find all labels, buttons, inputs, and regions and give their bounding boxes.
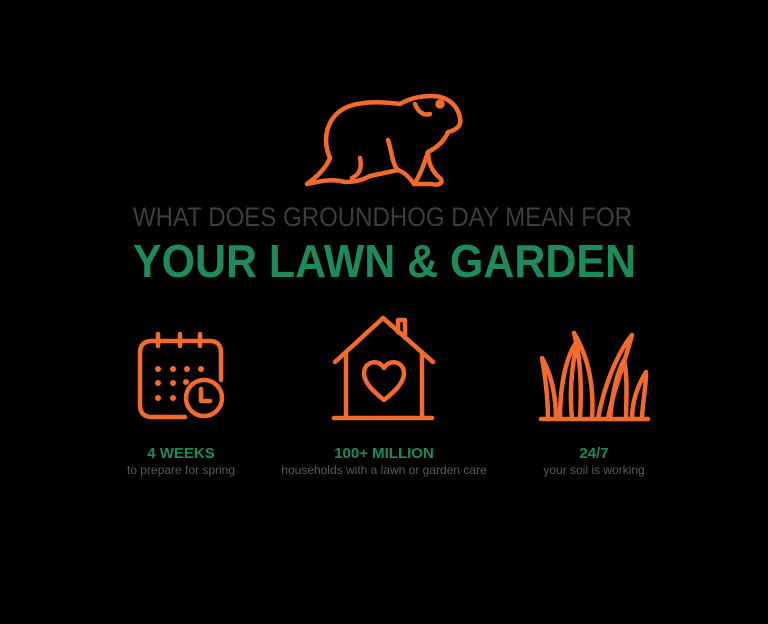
icon: calendar [140,334,222,417]
stat: 24/7 [543,445,645,477]
stat: 24/7: 24/7 [579,445,609,462]
title line 2: YOUR LAWN & GARDEN [133,235,636,287]
title line 1: WHAT DOES GROUNDHOG DAY MEAN FOR [133,202,632,232]
stat: 100+ million [281,445,487,477]
stat: 4 weeks: 4 WEEKS [147,445,215,462]
stat: 100+ million: households with a lawn or garden care [281,463,487,477]
stat: 4 weeks: to prepare for spring [127,463,235,477]
stat: 4 weeks [127,445,235,477]
icon: house with heart [334,318,433,418]
stat: 100+ million: 100+ MILLION [334,445,434,462]
stat: 24/7: your soil is working [543,463,645,477]
icon: grass [541,333,648,419]
icon: groundhog [307,96,460,185]
